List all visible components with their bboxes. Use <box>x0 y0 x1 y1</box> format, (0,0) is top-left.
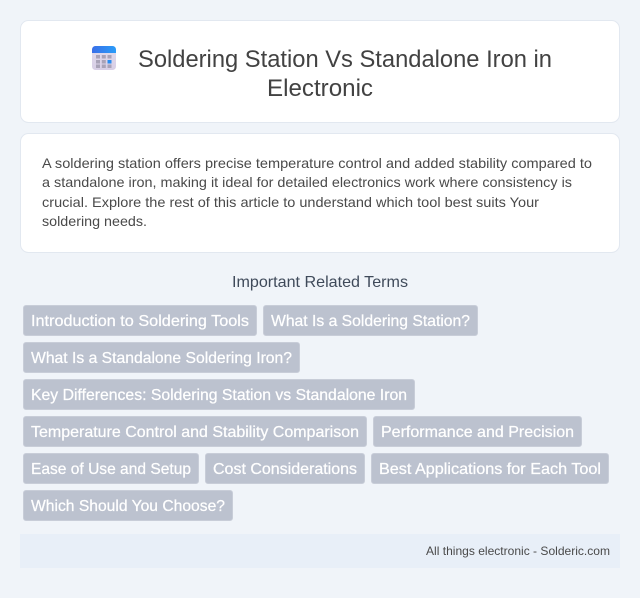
heading: important related terms: Important Related Terms <box>232 274 408 291</box>
tag: soldering station <box>264 306 478 336</box>
tag: ease of use <box>24 454 198 484</box>
footer <box>20 534 620 568</box>
tag: performance: Performance and Precision <box>381 424 574 441</box>
panel: related term tags <box>24 306 608 520</box>
text block: introduction paragraph: A soldering station offers precise temperature control and added stability compared to <box>42 155 592 171</box>
tag: which to choose <box>24 490 232 520</box>
tag: key differences: Key Differences: Soldering Station vs Standalone Iron <box>31 387 407 404</box>
text block: introduction paragraph: crucial. Explore the rest of this article to understand which tool best suits Your <box>42 194 539 210</box>
tag: which to choose: Which Should You Choose? <box>31 498 225 515</box>
title: Soldering Station Vs Standalone Iron in <box>138 46 552 73</box>
icon: calendar <box>92 46 116 70</box>
text block: introduction paragraph <box>42 155 592 229</box>
tag: temperature control <box>24 416 366 446</box>
tag: best applications <box>372 454 608 484</box>
panel: introduction <box>20 134 620 252</box>
tag: ease of use: Ease of Use and Setup <box>31 461 191 478</box>
panel: title card <box>20 20 620 122</box>
tag: best applications: Best Applications for Each Tool <box>379 461 601 478</box>
title: Electronic <box>267 75 373 102</box>
footer: All things electronic - Solderic.com <box>426 544 610 558</box>
tag: standalone iron: What Is a Standalone Soldering Iron? <box>31 350 292 367</box>
title <box>138 46 552 102</box>
tag: soldering station: What Is a Soldering Station? <box>271 313 470 330</box>
tag: key differences <box>24 380 414 410</box>
tag: cost: Cost Considerations <box>213 461 357 478</box>
tag: standalone iron <box>24 342 300 372</box>
tag: introduction: Introduction to Soldering Tools <box>31 313 249 330</box>
tag: temperature control: Temperature Control and Stability Comparison <box>31 424 359 441</box>
text block: introduction paragraph: soldering needs. <box>42 213 147 229</box>
text block: introduction paragraph: a standalone iron, making it ideal for detailed electronics work where consistency is <box>42 174 572 190</box>
tag: cost <box>206 454 364 484</box>
tag: performance <box>374 416 582 446</box>
tag: introduction <box>24 306 256 336</box>
